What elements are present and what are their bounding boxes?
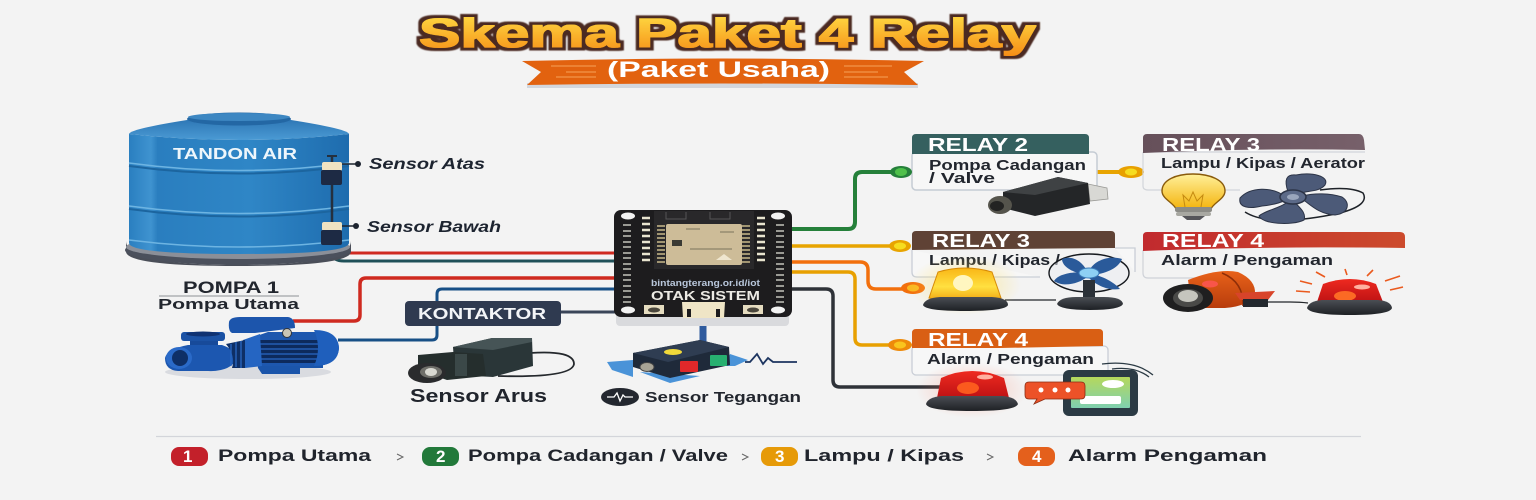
legend arrow <box>742 454 748 460</box>
card header <box>912 134 1089 154</box>
card body <box>912 346 1108 375</box>
card body <box>1143 250 1240 278</box>
mounting holes <box>621 212 785 314</box>
panel: ESP32 board, system brain <box>614 210 792 326</box>
panel: Relay 3, lamp fan aerator: RELAY 3 <box>1162 135 1260 155</box>
tank roof <box>129 120 349 140</box>
chip module <box>657 226 750 262</box>
panel: water tank <box>125 112 351 266</box>
tank base <box>126 241 351 266</box>
wire lamp to fan <box>1005 299 1056 301</box>
tank label: TANDON AIR <box>173 146 297 163</box>
card body <box>912 152 1097 190</box>
card text: Lampu / Kipas / <box>929 253 1060 269</box>
title: Skema Paket 4 Relay <box>419 10 1036 56</box>
ribbon subtitle: (Paket Usaha) <box>607 57 830 82</box>
tank body <box>129 134 349 254</box>
label: Sensor Tegangan with icon: Sensor Tegangan <box>645 389 801 406</box>
icon: exhaust fan <box>1245 189 1364 220</box>
card text: Pompa Cadangan <box>929 157 1086 174</box>
label: Sensor Bawah: Sensor Bawah <box>367 219 501 236</box>
icon: smartphone <box>1063 370 1138 416</box>
board URL: bintangterang.or.id/iot <box>651 278 760 288</box>
card body <box>1143 152 1365 190</box>
panel: Relay 3 middle, lamp and fan: RELAY 3 <box>932 231 1030 251</box>
icon: voltage sensor <box>607 340 797 383</box>
panel: Relay 4 middle, alarm and phone: RELAY 4 <box>928 330 1028 350</box>
card text: Alarm / Pengaman <box>1161 253 1333 269</box>
panel: Relay 4 middle, alarm and phone <box>888 329 1153 418</box>
legend item 4 <box>1018 447 1267 466</box>
panel: Relay 3, lamp fan aerator <box>1118 134 1365 223</box>
panel: Relay 4, alarm and protection: RELAY 4 <box>1162 231 1264 251</box>
legend item 1: 1 <box>183 447 192 466</box>
divider <box>156 436 1361 438</box>
icon: valve <box>1088 184 1108 201</box>
connector node out <box>901 282 925 294</box>
panel: Relay 4, alarm and protection <box>1143 231 1405 315</box>
label: Pompa 1 <box>158 278 300 313</box>
pump feet <box>257 360 323 374</box>
label: Kontaktor <box>405 301 561 326</box>
icon: water pump <box>165 317 339 379</box>
panel: Relay 3 middle, lamp and fan <box>889 231 1135 315</box>
card text: Lampu / Kipas / Aerator <box>1161 156 1365 172</box>
connector and buttons <box>644 305 664 314</box>
signal arcs <box>1102 363 1153 377</box>
label: Pompa 1: POMPA 1 <box>183 278 279 297</box>
wires: tank and pump to board <box>293 244 703 344</box>
card text: Alarm / Pengaman <box>927 352 1094 368</box>
legend item 2: Pompa Cadangan / Valve <box>468 447 728 465</box>
legend item 1 <box>171 447 372 466</box>
legend item 4: 4 <box>1032 447 1042 466</box>
board PCB <box>614 210 792 317</box>
label: Sensor Tegangan with icon <box>601 388 801 406</box>
label: Sensor Atas: Sensor Atas <box>369 156 485 173</box>
legend item 1: Pompa Utama <box>218 447 372 465</box>
alarm rays <box>1296 269 1403 292</box>
legend arrow <box>397 454 403 460</box>
pin headers <box>623 225 631 302</box>
panel: Relay 2 <box>890 134 1108 216</box>
connector node <box>1118 166 1144 178</box>
wires: board to relays <box>790 172 1125 387</box>
card header <box>912 329 1103 348</box>
label: Kontaktor: KONTAKTOR <box>418 306 547 323</box>
legend item 2 <box>422 447 728 466</box>
board name: OTAK SISTEM <box>651 288 760 303</box>
icon: light bulb <box>1162 174 1225 209</box>
icon: current sensor <box>408 338 574 383</box>
icon: red beacon <box>1317 279 1383 305</box>
icon: upper and lower level sensors <box>321 156 361 245</box>
icon: chat bubble <box>1025 382 1085 404</box>
board shadow <box>616 300 789 326</box>
connector node in <box>890 166 912 178</box>
card body <box>912 248 1135 277</box>
legend arrow <box>987 454 993 460</box>
terminal box <box>229 317 295 333</box>
connector node in <box>888 339 912 351</box>
ribbon subtitle <box>522 57 924 88</box>
legend item 4: Alarm Pengaman <box>1068 447 1267 465</box>
panel: Relay 2: / Valve <box>929 170 995 187</box>
legend <box>171 447 1267 466</box>
legend item 3 <box>761 447 964 466</box>
label: Sensor Arus: Sensor Arus <box>410 386 547 406</box>
card header <box>912 231 1115 250</box>
legend item 3: Lampu / Kipas <box>804 447 964 465</box>
panel: Relay 2: RELAY 2 <box>928 135 1028 155</box>
motor body <box>245 332 339 366</box>
legend item 3: 3 <box>775 447 784 466</box>
tank bands <box>129 163 349 247</box>
label: Pompa 1: Pompa Utama <box>158 296 300 313</box>
volute and inlet <box>190 339 218 349</box>
icon: siren <box>1268 302 1308 303</box>
card header <box>1143 232 1405 251</box>
connector node in <box>889 240 911 252</box>
icon: red beacon <box>916 362 1028 418</box>
card header <box>1143 134 1365 153</box>
icon: yellow beacon <box>909 255 1021 315</box>
icon: desk fan <box>1049 254 1129 292</box>
legend item 2: 2 <box>436 447 445 466</box>
